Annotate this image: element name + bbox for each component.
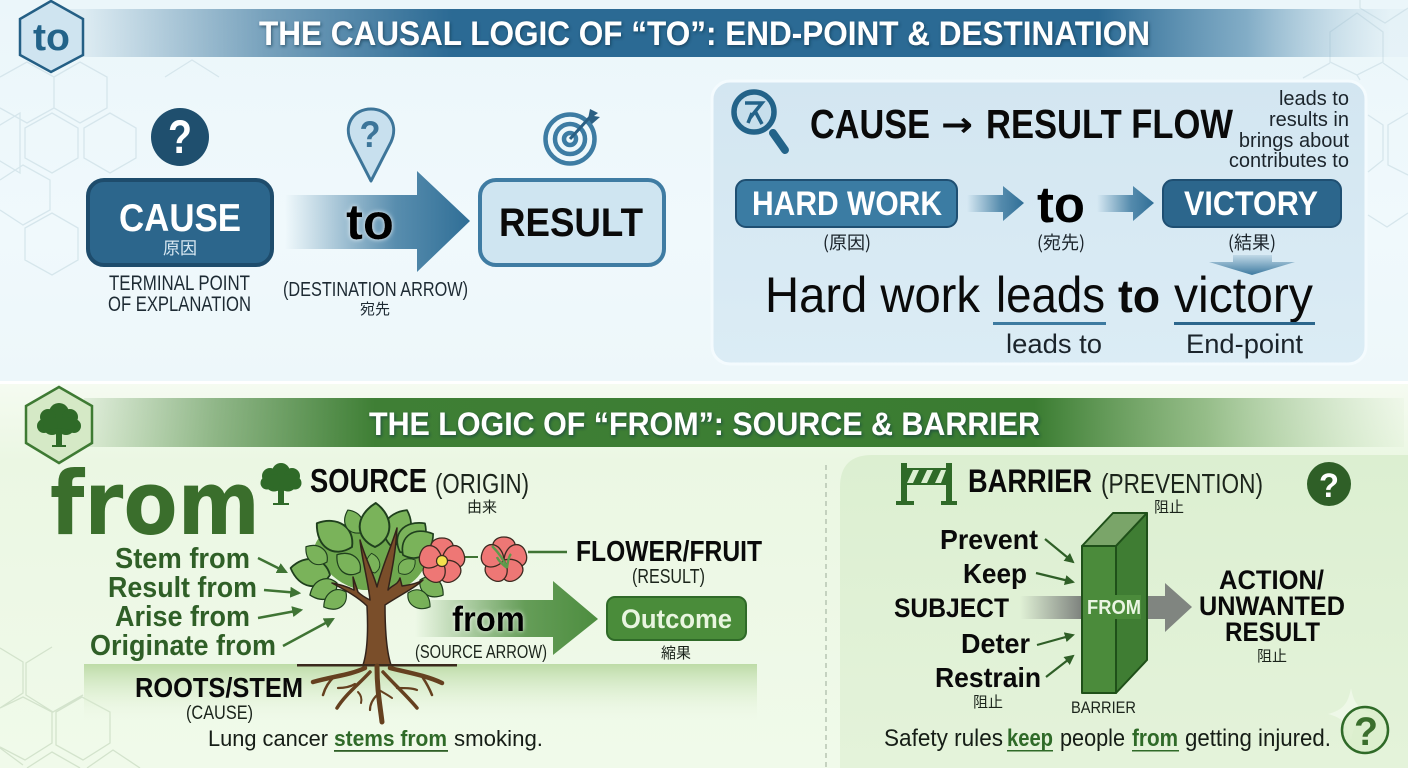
hard work box: HARD WORK xyxy=(752,185,942,223)
synonyms list: results in xyxy=(1269,109,1349,131)
section background: to xyxy=(0,0,1408,381)
illustration: flowers xyxy=(417,537,567,586)
icon: question circle: ? xyxy=(1319,467,1339,505)
prevention verbs: Keep xyxy=(963,558,1027,589)
example sentence: smoking. xyxy=(454,726,543,751)
ground line xyxy=(297,664,457,666)
japanese glosses: (結果) xyxy=(1228,229,1276,255)
cause caption xyxy=(108,272,251,316)
action label xyxy=(1199,565,1345,647)
source heading xyxy=(310,462,529,517)
action label: RESULT xyxy=(1225,617,1320,647)
example sentence: from xyxy=(1132,725,1178,752)
barrier block: FROM xyxy=(1087,597,1141,619)
action label: UNWANTED xyxy=(1199,591,1345,621)
flow heading: CAUSE xyxy=(810,101,930,147)
flow heading: → xyxy=(941,105,973,145)
cause caption: TERMINAL POINT xyxy=(109,272,250,295)
sentence annotations: leads to xyxy=(1006,329,1102,359)
example sentence xyxy=(884,725,1331,752)
phrase list: Result from xyxy=(108,572,257,604)
synonyms list: leads to xyxy=(1279,88,1349,110)
panel: cause result flow xyxy=(712,81,1366,364)
panel: source xyxy=(50,452,762,752)
barrier label: BARRIER xyxy=(1071,698,1136,717)
icon: location pin with question mark xyxy=(348,109,394,181)
prevention verbs xyxy=(894,524,1041,693)
icon: small tree xyxy=(260,463,302,505)
icon: question circle xyxy=(151,108,209,166)
victory box xyxy=(1163,180,1341,227)
synonyms list: brings about xyxy=(1239,130,1349,152)
outcome box: Outcome xyxy=(621,604,732,634)
arrow caption: (SOURCE ARROW) xyxy=(415,642,547,662)
example sentence: leads xyxy=(996,267,1105,323)
flower label: (RESULT) xyxy=(632,566,705,588)
hex badge: to: to xyxy=(33,17,70,59)
down arrow xyxy=(1209,255,1295,275)
outcome gloss: 縮果 xyxy=(661,642,691,663)
barrier block xyxy=(1082,513,1147,693)
example sentence: Lung cancer xyxy=(208,726,328,751)
result box xyxy=(480,180,664,265)
victory box: VICTORY xyxy=(1184,185,1318,223)
barrier heading: BARRIER xyxy=(968,463,1092,499)
action gloss: 阻止 xyxy=(1257,645,1287,666)
header: to xyxy=(20,1,1408,72)
example sentence: stems from xyxy=(334,726,447,751)
flow heading: RESULT FLOW xyxy=(986,101,1233,147)
roots label: ROOTS/STEM xyxy=(135,672,303,703)
source arrow: from xyxy=(452,600,525,639)
synonyms list: contributes to xyxy=(1229,150,1349,172)
panel: barrier xyxy=(840,455,1408,768)
outcome box xyxy=(607,597,746,640)
flow heading xyxy=(810,101,1233,147)
prevention verbs: Prevent xyxy=(940,524,1038,555)
result box: RESULT xyxy=(499,201,643,245)
japanese glosses: (原因) xyxy=(823,229,871,255)
barrier heading xyxy=(968,463,1263,517)
prevention verbs: SUBJECT xyxy=(894,593,1009,623)
illustration: tree xyxy=(288,503,457,722)
to word: to xyxy=(1037,176,1085,233)
example sentence: getting injured. xyxy=(1185,725,1331,752)
example sentence xyxy=(765,267,1313,323)
icon: question circle xyxy=(1307,462,1351,506)
arrow xyxy=(1097,186,1154,221)
sentence annotations: End-point xyxy=(1186,329,1303,359)
action label: ACTION/ xyxy=(1219,565,1324,595)
roots xyxy=(313,666,442,722)
example sentence: keep xyxy=(1007,725,1053,752)
arrow caption xyxy=(283,279,468,319)
cause caption: OF EXPLANATION xyxy=(108,293,251,316)
icon: sparkle and question xyxy=(1328,688,1388,754)
verbs gloss: 阻止 xyxy=(973,691,1003,712)
phrase list xyxy=(90,543,276,662)
japanese glosses xyxy=(823,229,1276,255)
arrow caption: (DESTINATION ARROW) xyxy=(283,279,468,301)
barrier heading: 阻止 xyxy=(1154,496,1184,517)
example sentence: people xyxy=(1060,725,1125,752)
icon: question circle: ? xyxy=(168,110,192,163)
flower label xyxy=(576,536,762,588)
prevention verbs: Deter xyxy=(961,628,1030,659)
icon: sparkle and question: ? xyxy=(1354,710,1378,754)
title: THE LOGIC OF “FROM”: SOURCE & BARRIER xyxy=(369,406,1040,442)
roots label xyxy=(135,672,303,724)
icon: location pin with question mark: ? xyxy=(360,114,380,155)
title: THE CAUSAL LOGIC OF “TO”: END-POINT & DESTINATION xyxy=(259,15,1150,53)
example sentence: Safety rules xyxy=(884,725,1003,752)
barrier heading: (PREVENTION) xyxy=(1101,468,1263,499)
example sentence: victory xyxy=(1174,267,1313,323)
destination arrow xyxy=(285,171,470,272)
destination arrow: to xyxy=(346,194,394,250)
trunk xyxy=(332,528,423,665)
cause box: CAUSE xyxy=(119,197,241,240)
icon: barricade xyxy=(896,463,957,505)
diagram: cause to result xyxy=(88,108,664,319)
title bar xyxy=(62,9,1408,57)
blocked arrow xyxy=(1020,583,1192,632)
flower label: FLOWER/FRUIT xyxy=(576,536,762,568)
arrow xyxy=(967,186,1024,221)
header: from xyxy=(26,387,1404,463)
sentence annotations xyxy=(1006,329,1303,359)
icon: magnifier xyxy=(734,92,785,150)
example sentence: Hard work xyxy=(765,267,981,323)
japanese glosses: (宛先) xyxy=(1037,229,1085,255)
example sentence xyxy=(208,726,543,752)
from word: from xyxy=(50,452,260,555)
verb arrows xyxy=(1036,539,1073,677)
source arrow xyxy=(415,581,598,655)
source heading: (ORIGIN) xyxy=(435,468,529,499)
synonyms list xyxy=(1229,88,1349,172)
roots label: (CAUSE) xyxy=(186,703,253,724)
ground band xyxy=(84,664,757,720)
hex badge: to xyxy=(20,1,83,72)
icon: target xyxy=(546,109,600,164)
example sentence: to xyxy=(1118,270,1160,322)
arrow caption: 宛先 xyxy=(360,298,390,319)
phrase arrows xyxy=(258,558,333,646)
cause box: 原因 xyxy=(163,234,197,259)
phrase list: Stem from xyxy=(115,543,250,575)
cause box xyxy=(88,180,272,265)
source heading: 由来 xyxy=(467,496,497,517)
hex badge: tree xyxy=(26,387,92,463)
section background: from xyxy=(0,384,1408,768)
prevention verbs: Restrain xyxy=(935,662,1041,693)
title bar xyxy=(84,398,1404,447)
phrase list: Originate from xyxy=(90,630,276,662)
source heading: SOURCE xyxy=(310,462,427,499)
phrase list: Arise from xyxy=(115,601,250,633)
